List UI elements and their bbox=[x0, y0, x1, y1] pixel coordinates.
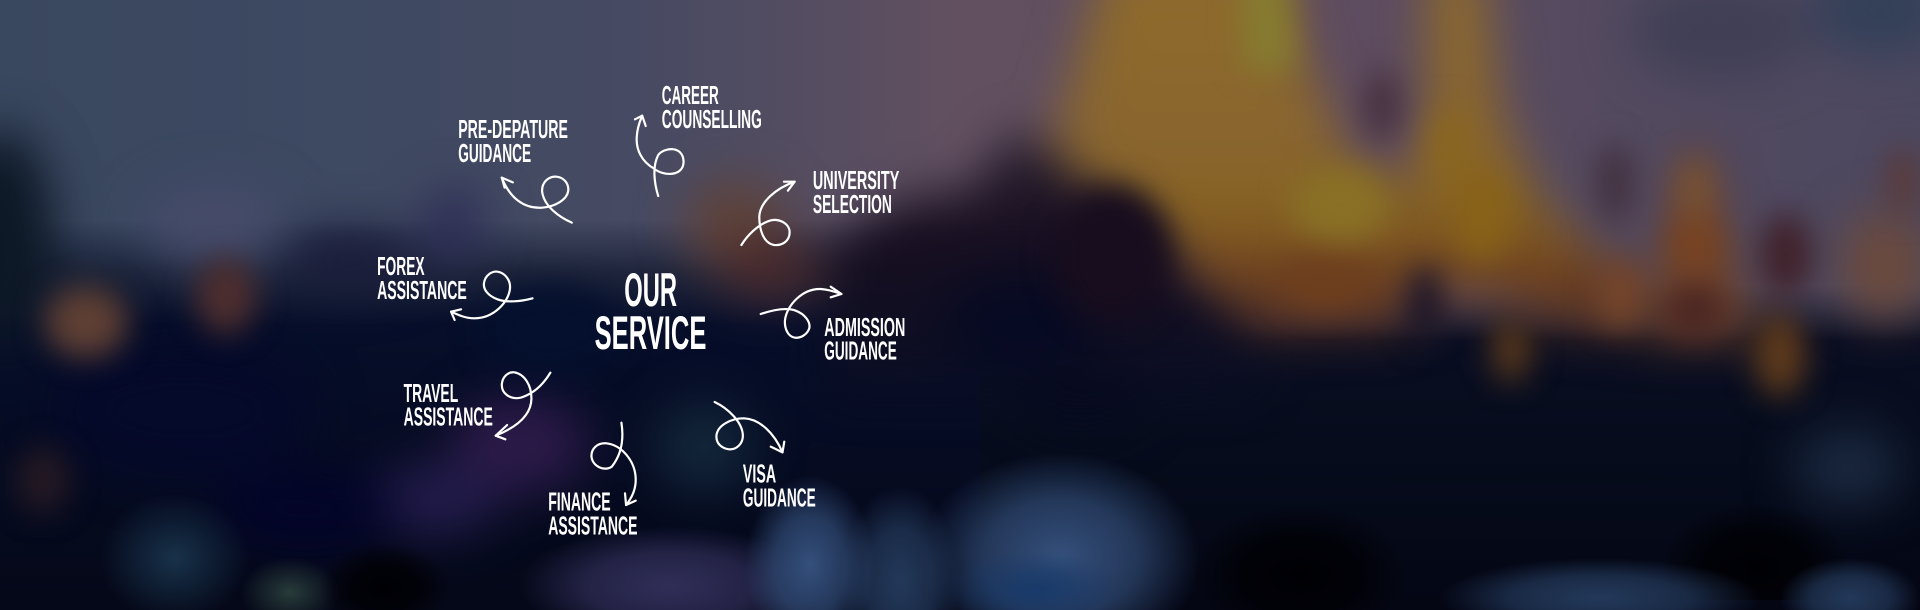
item: career counselling bbox=[635, 82, 762, 196]
label: ASSISTANCE bbox=[377, 277, 467, 305]
label bbox=[743, 460, 816, 513]
label: FOREX bbox=[377, 253, 425, 281]
title: SERVICE bbox=[595, 306, 706, 359]
item: university selection bbox=[741, 167, 899, 245]
label: TRAVEL bbox=[404, 380, 458, 408]
label: PRE-DEPATURE bbox=[458, 116, 568, 144]
title bbox=[595, 263, 706, 359]
arrow bbox=[635, 116, 684, 196]
item: pre-depature guidance bbox=[458, 116, 572, 223]
label bbox=[377, 253, 467, 305]
item: admission guidance bbox=[761, 287, 905, 366]
label: GUIDANCE bbox=[458, 140, 531, 168]
label bbox=[813, 167, 899, 219]
item: visa guidance bbox=[715, 402, 816, 513]
label bbox=[404, 380, 493, 432]
arrow bbox=[496, 372, 550, 439]
label bbox=[458, 116, 568, 168]
arrow bbox=[715, 402, 784, 452]
item: travel assistance bbox=[404, 372, 550, 439]
label: ADMISSION bbox=[824, 314, 905, 342]
title: OUR bbox=[624, 263, 677, 316]
label: FINANCE bbox=[548, 488, 611, 516]
label: COUNSELLING bbox=[662, 106, 762, 134]
label: SELECTION bbox=[813, 191, 892, 219]
item: forex assistance bbox=[377, 253, 532, 320]
arrow bbox=[451, 272, 532, 320]
arrow bbox=[761, 287, 841, 338]
label bbox=[662, 82, 762, 134]
label: CAREER bbox=[662, 82, 719, 110]
label: VISA bbox=[743, 460, 776, 488]
label: GUIDANCE bbox=[824, 338, 897, 366]
label: UNIVERSITY bbox=[813, 167, 899, 195]
arrow bbox=[591, 423, 636, 505]
label bbox=[824, 314, 905, 366]
arrow bbox=[502, 177, 572, 223]
label: ASSISTANCE bbox=[548, 512, 638, 540]
label: ASSISTANCE bbox=[404, 404, 493, 432]
label bbox=[548, 488, 638, 540]
label: GUIDANCE bbox=[743, 485, 816, 513]
arrow bbox=[741, 182, 795, 245]
item: finance assistance bbox=[548, 423, 638, 540]
